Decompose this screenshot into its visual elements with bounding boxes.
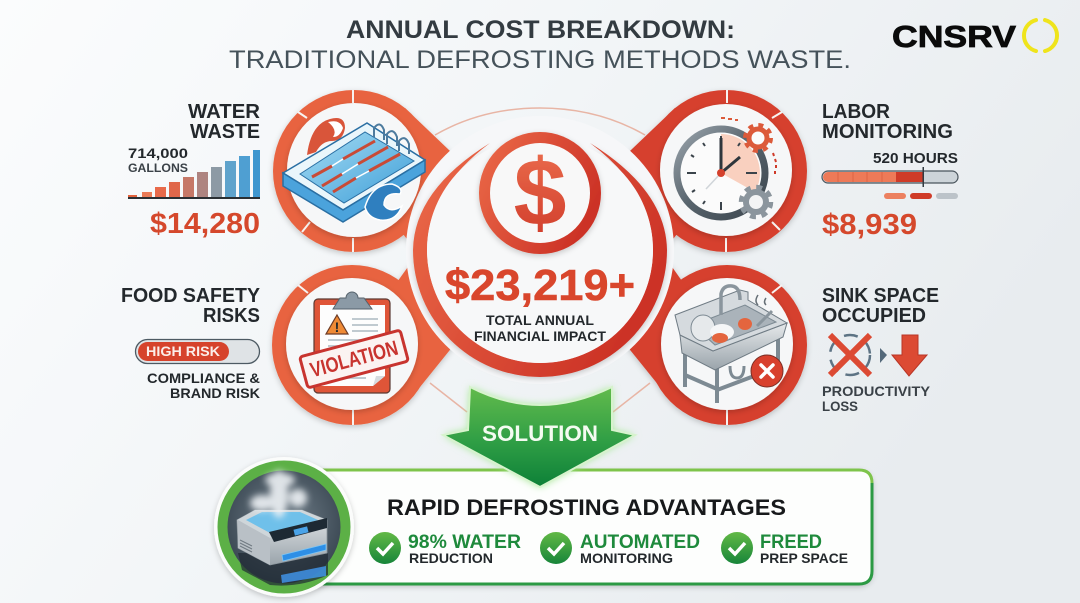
advantage: water reduction: REDUCTION (409, 550, 493, 566)
title (229, 16, 851, 74)
heading: water waste (188, 101, 261, 143)
icon: violation clipboard: ! (335, 319, 339, 335)
total caption: TOTAL ANNUAL (486, 312, 594, 328)
panel: food safety ring (272, 264, 470, 425)
panel: water waste ring (273, 90, 472, 252)
hours label: 520 HOURS (873, 150, 958, 167)
advantage: water reduction: 98% WATER (408, 532, 521, 553)
productivity caption (822, 383, 931, 414)
arrow: solution: SOLUTION (482, 421, 598, 446)
heading: food safety risks: FOOD SAFETY (121, 285, 261, 307)
logo: CNSRV: CNSRV (892, 19, 1016, 54)
title: ANNUAL COST BREAKDOWN: (346, 16, 735, 44)
heading: food safety risks: RISKS (203, 305, 260, 327)
panel: sink space ring (610, 264, 807, 425)
icon: dollar badge: $ (514, 140, 566, 246)
advantages heading: RAPID DEFROSTING ADVANTAGES (387, 495, 786, 520)
compliance text (147, 370, 260, 401)
productivity caption: PRODUCTIVITY (822, 383, 931, 399)
heading: water waste: WASTE (190, 121, 260, 143)
title: TRADITIONAL DEFROSTING METHODS WASTE. (229, 46, 851, 74)
heading: sink space occupied: OCCUPIED (822, 305, 926, 327)
heading: sink space occupied: SINK SPACE (822, 285, 939, 307)
central red ring (413, 143, 667, 377)
total amount: $23,219+ (445, 261, 635, 310)
heading: labor monitoring: MONITORING (822, 121, 953, 143)
progress bar: hours (822, 167, 958, 199)
connector lines (430, 108, 650, 412)
heading: food safety risks (121, 285, 261, 327)
compliance text: BRAND RISK (170, 385, 260, 401)
icon: productivity loss arrows (830, 335, 927, 376)
icon: clock with gears (660, 104, 792, 236)
gallons label (128, 145, 188, 175)
icon: dollar badge (479, 132, 601, 254)
icon: violation clipboard (286, 278, 418, 410)
high risk meter: HIGH RISK (146, 343, 220, 359)
total caption: FINANCIAL IMPACT (474, 328, 606, 344)
heading: sink space occupied (822, 285, 939, 327)
panel: labor monitoring ring (608, 90, 807, 252)
advantage: water reduction (369, 532, 521, 566)
panel: rapid defrosting advantages (300, 469, 873, 585)
gallons label: 714,000 (128, 145, 188, 161)
steam (250, 470, 307, 518)
icon: full sink (661, 278, 793, 410)
panel: central total (406, 116, 674, 384)
high risk meter (136, 340, 260, 364)
bar chart: water usage (128, 150, 260, 199)
cost: water waste: $14,280 (150, 208, 260, 240)
compliance text: COMPLIANCE & (147, 370, 260, 386)
total caption (474, 312, 606, 344)
advantage: automated monitoring: MONITORING (580, 550, 673, 566)
advantage: automated monitoring: AUTOMATED (580, 532, 700, 553)
device body (237, 510, 327, 565)
cost: labor monitoring: $8,939 (822, 209, 917, 241)
advantage: automated monitoring (540, 532, 700, 566)
violation stamp: VIOLATION (308, 337, 401, 382)
logo: CNSRV (892, 19, 1057, 54)
arrow: solution (443, 387, 635, 487)
advantage: freed prep space: PREP SPACE (760, 550, 848, 566)
heading: labor monitoring: LABOR (822, 101, 891, 123)
icon: rapid defrosting device (214, 457, 354, 597)
advantage: freed prep space (721, 532, 848, 566)
productivity caption: LOSS (822, 398, 858, 414)
icon: swimming pool (283, 103, 425, 237)
device reflection (238, 553, 328, 586)
gallons label: GALLONS (128, 161, 188, 175)
heading: water waste: WATER (188, 101, 261, 123)
heading: labor monitoring (822, 101, 953, 143)
advantage: freed prep space: FREED (760, 532, 822, 553)
